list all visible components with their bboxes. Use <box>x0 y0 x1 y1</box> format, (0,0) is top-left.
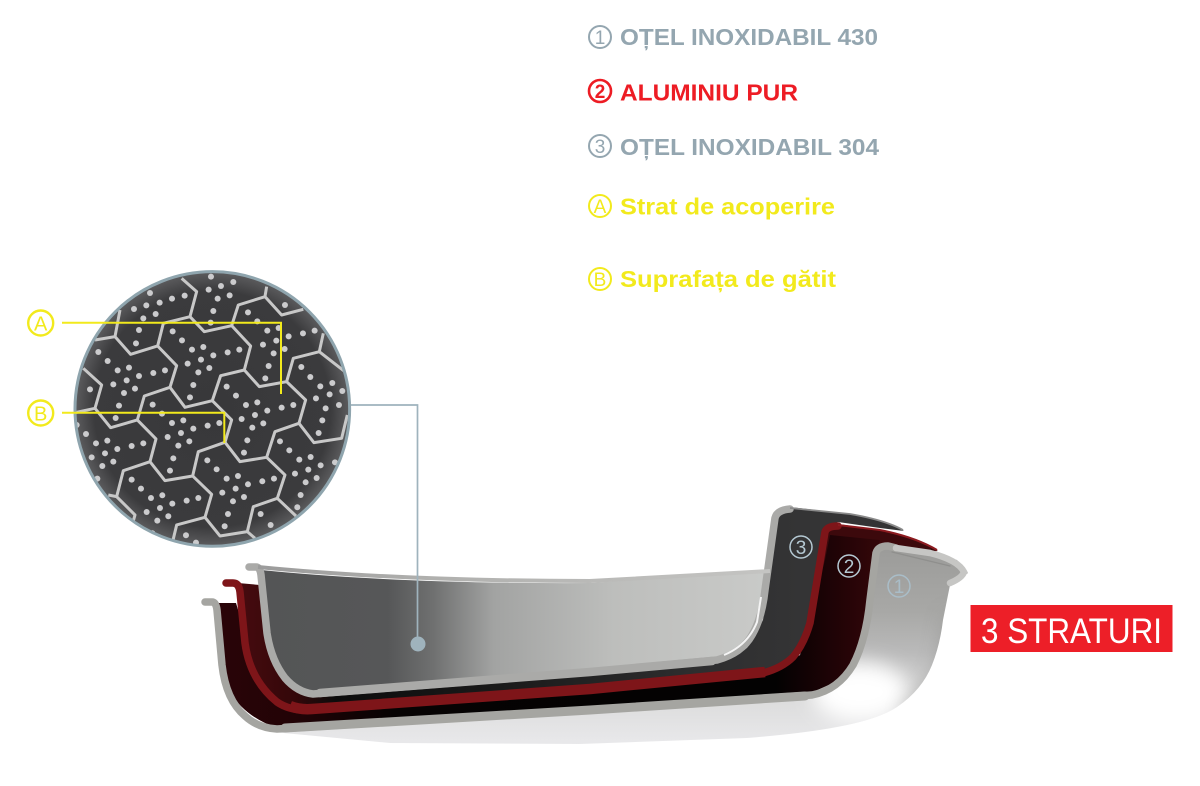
connector from detail circle to pan <box>349 405 426 652</box>
layer 3 highlight <box>724 597 761 655</box>
legend item 2: aluminiu pur: ALUMINIU PUR <box>620 80 798 106</box>
legend item 3: otel inoxidabil 304: 3 <box>595 137 605 158</box>
layer 1 steel section <box>205 546 896 729</box>
outer layer filler <box>214 535 880 728</box>
cutaway pan <box>205 507 968 744</box>
legend <box>589 24 879 293</box>
legend item 1: otel inoxidabil 430: OȚEL INOXIDABIL 430 <box>620 24 878 50</box>
layer 3 steel section <box>249 509 790 694</box>
detail circle: cooking surface texture <box>74 272 350 549</box>
layer label 1 <box>888 575 910 598</box>
legend item B: suprafata de gatit: B <box>594 270 606 291</box>
layer label 3 <box>790 536 812 559</box>
pan interior <box>261 570 770 694</box>
legend item 2: aluminiu pur: 2 <box>595 82 605 103</box>
callout B: B <box>34 404 47 426</box>
layer 3 top edge <box>790 508 903 530</box>
layer label 3: 3 <box>796 538 806 559</box>
layer label 2 <box>838 555 860 578</box>
legend item A: strat de acoperire: A <box>594 197 607 218</box>
layer 2 top edge <box>838 525 937 550</box>
layer label 1: 1 <box>894 577 904 598</box>
outer rim <box>892 548 964 583</box>
legend item A: strat de acoperire: Strat de acoperire <box>620 194 835 220</box>
legend item 1: otel inoxidabil 430: 1 <box>595 28 605 49</box>
callout A: A <box>34 314 48 336</box>
legend item B: suprafata de gatit: Suprafața de gătit <box>620 266 836 293</box>
inner rim highlight <box>258 567 770 581</box>
layer 2 aluminium section <box>226 526 838 710</box>
red layer back rim <box>820 524 938 590</box>
inner layer filler <box>238 510 830 712</box>
layer label 2: 2 <box>844 557 854 578</box>
badge: 3 straturi: 3 STRATURI <box>981 612 1162 651</box>
pan exterior <box>273 543 968 744</box>
callout A <box>28 310 281 394</box>
legend item 3: otel inoxidabil 304: OȚEL INOXIDABIL 304 <box>620 134 879 160</box>
layer 3 back rim <box>778 507 904 560</box>
callout B <box>28 400 224 443</box>
